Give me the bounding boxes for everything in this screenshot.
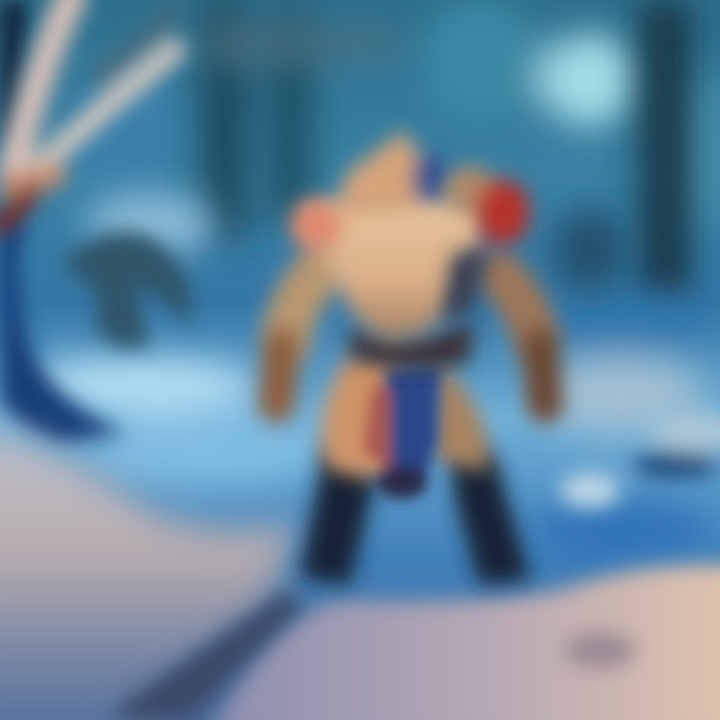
snow: right foreground drift — [215, 564, 720, 720]
creature thighs — [322, 355, 488, 477]
snow: left foreground drift — [0, 425, 300, 720]
creature shoulders — [290, 166, 530, 325]
creature legs — [300, 445, 530, 585]
shadow: diagonal on snow — [115, 590, 636, 720]
branches: pale bare tree limbs — [0, 0, 175, 225]
creature torso — [305, 191, 490, 340]
creature loincloth: red and blue — [364, 365, 440, 500]
bush: dark mounds at right — [552, 208, 628, 292]
trees: dark background trunks — [200, 0, 690, 300]
glow: pale light upper right — [70, 0, 720, 230]
tree: curved dark blue trunk at left — [0, 0, 125, 445]
snow bank: light blue ground bands — [20, 193, 720, 558]
creature — [277, 130, 545, 585]
snow clumps: right midground — [560, 412, 720, 508]
creature arms — [277, 265, 545, 405]
bush: dark mound at left — [60, 232, 192, 348]
creature waist belt — [350, 320, 475, 369]
creature head and neck — [340, 130, 448, 215]
